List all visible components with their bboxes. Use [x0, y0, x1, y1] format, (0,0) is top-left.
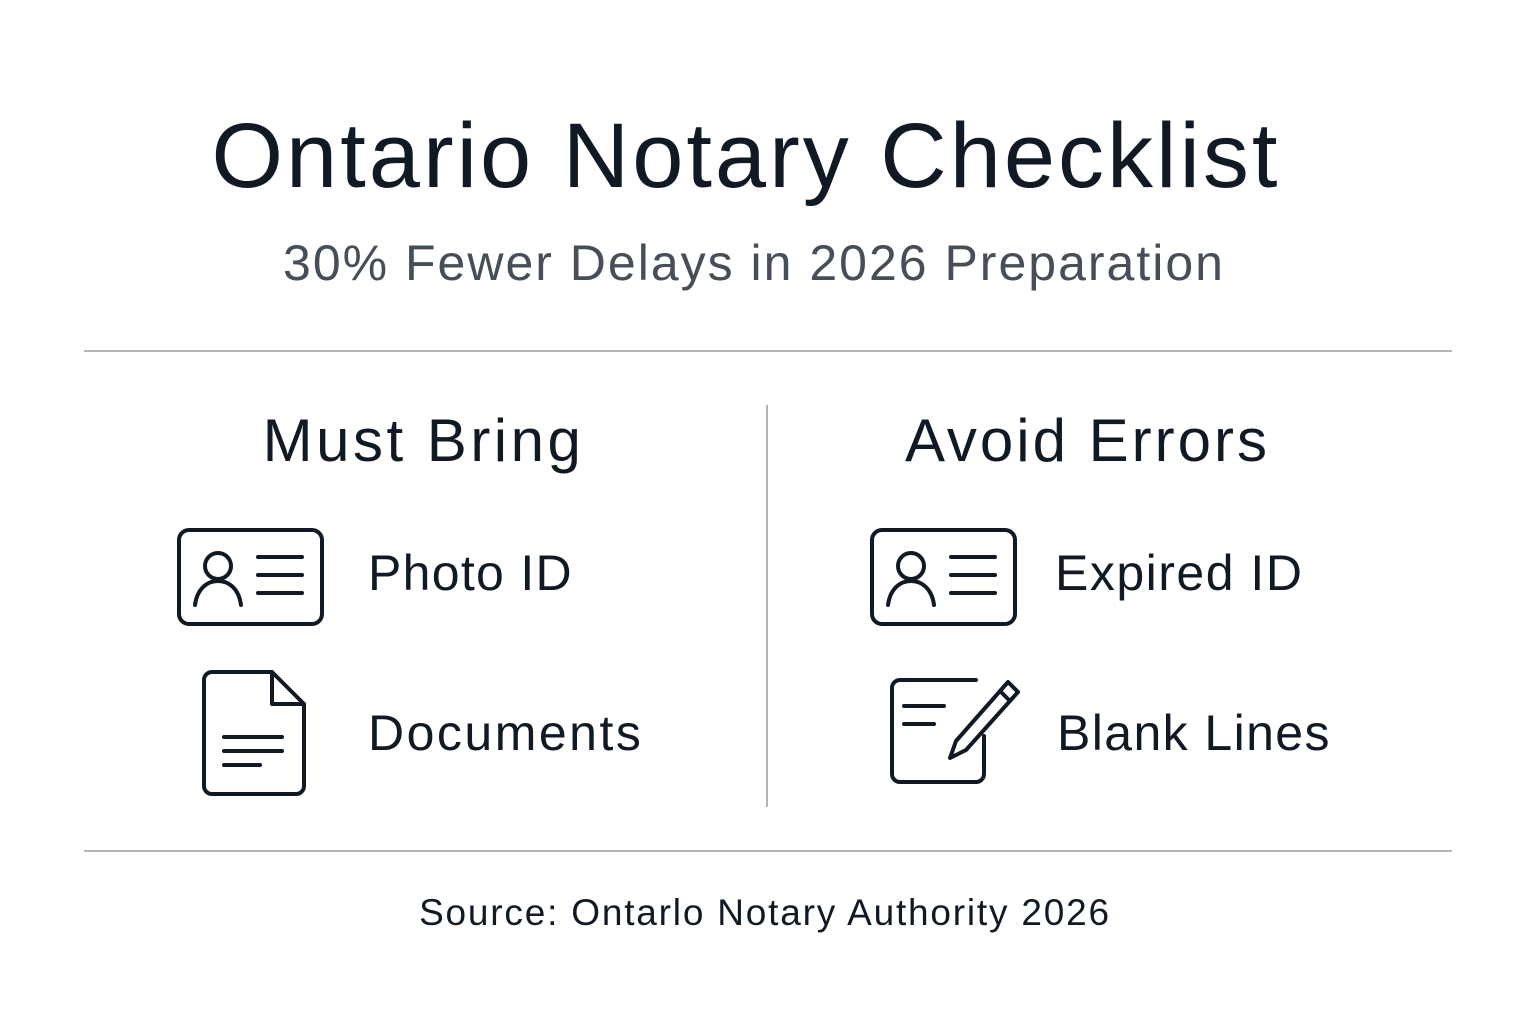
text: documents: Documents — [368, 705, 643, 761]
icon: expired id card — [870, 528, 1017, 626]
icon: document — [202, 670, 306, 796]
heading: must bring: Must Bring — [263, 407, 584, 474]
text: blank lines: Blank Lines — [1057, 705, 1331, 761]
text: photo id: Photo ID — [368, 545, 573, 601]
panel: must bring — [177, 407, 643, 796]
heading: avoid errors: Avoid Errors — [905, 407, 1270, 474]
text: expired id: Expired ID — [1055, 545, 1303, 601]
source footnote: Source: Ontarlo Notary Authority 2026 — [419, 892, 1111, 933]
subtitle: 30% Fewer Delays in 2026 Preparation — [283, 235, 1225, 291]
icon: photo id card — [177, 528, 324, 626]
title: Ontario Notary Checklist — [212, 105, 1280, 207]
panel: avoid errors — [870, 407, 1331, 784]
icon: notepad with pencil — [890, 678, 1020, 784]
